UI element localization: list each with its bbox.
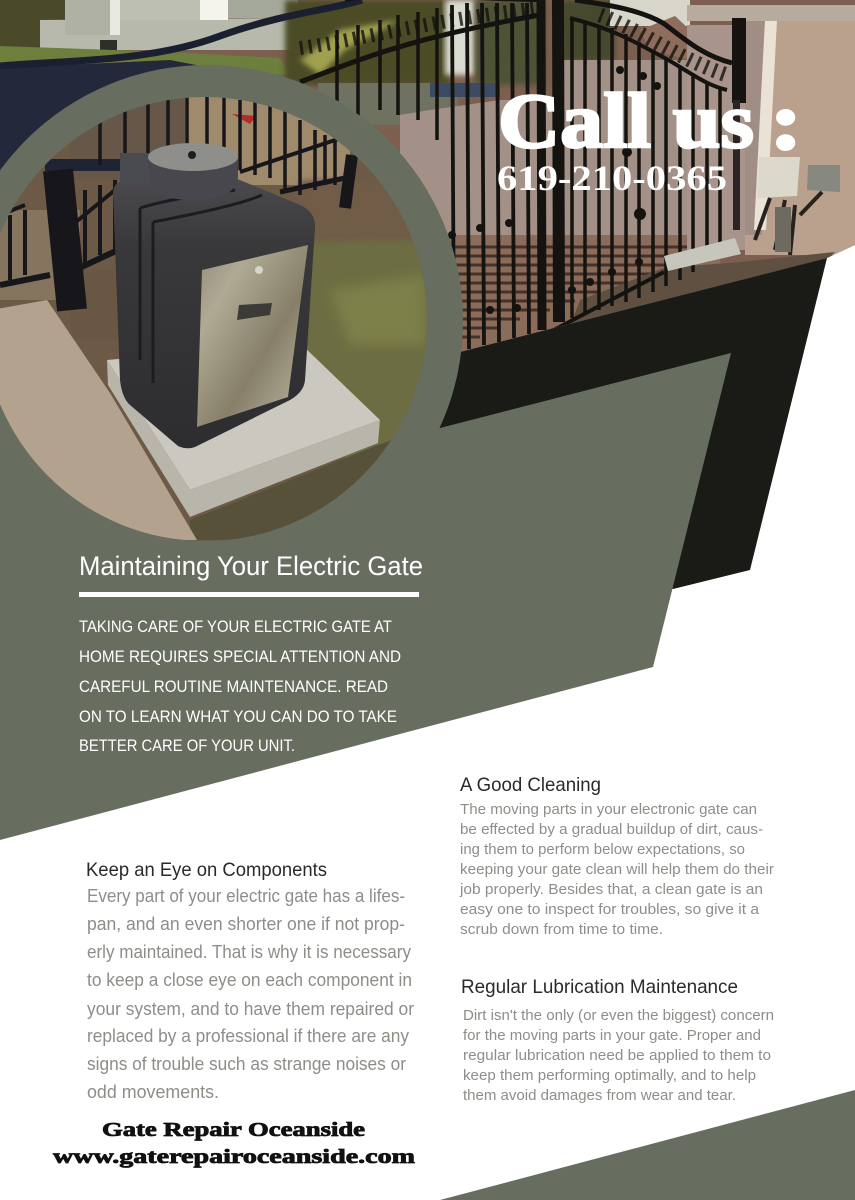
section: keep an eye on components: signs of trouble such as strange noises or (87, 1053, 406, 1074)
black angular shape (430, 258, 827, 589)
section: keep an eye on components: to keep a close eye on each component in (87, 969, 412, 990)
panel title: Maintaining Your Electric Gate (79, 551, 423, 581)
section: keep an eye on components: replaced by a professional if there are any (87, 1025, 410, 1046)
call us heading: : (771, 78, 801, 165)
left gate panel (0, 60, 198, 170)
section: a good cleaning: be effected by a gradual buildup of dirt, caus- (460, 821, 763, 838)
intro text (79, 617, 401, 755)
gate ironwork (0, 0, 732, 353)
concrete base (107, 343, 380, 517)
fence (0, 97, 352, 310)
section: keep an eye on components: odd movements. (87, 1081, 219, 1102)
section: keep an eye on components: erly maintained. That is why it is necessary (87, 941, 412, 962)
palm trees (285, 0, 450, 85)
motor cap (120, 143, 238, 200)
intro text: CAREFUL ROUTINE MAINTENANCE. READ (79, 677, 388, 696)
intro text: ON TO LEARN WHAT YOU CAN DO TO TAKE (79, 707, 397, 726)
section: a good cleaning: A Good Cleaning (460, 774, 601, 796)
bottom right green wedge (440, 1090, 855, 1200)
mulch behind fence (185, 95, 350, 185)
gate opener arm (664, 238, 741, 271)
section: regular lubrication maintenance: for the moving parts in your gate. Proper and (463, 1027, 761, 1044)
section: a good cleaning: scrub down from time to time. (460, 921, 663, 938)
green panel (0, 300, 731, 840)
background house (40, 0, 300, 51)
section: a good cleaning: ing them to perform below expectations, so (460, 841, 745, 858)
call us heading: Call us (498, 77, 754, 164)
concrete path (0, 300, 197, 540)
footer company name: Gate Repair Oceanside (102, 1119, 365, 1141)
footer website: www.gaterepairoceanside.com (53, 1146, 415, 1168)
driveway apron (570, 252, 835, 326)
section: regular lubrication maintenance: Dirt isn't the only (or even the biggest) concern (463, 1007, 774, 1024)
back fence wall (70, 95, 190, 180)
back wall (400, 100, 560, 240)
keyhole (255, 266, 263, 274)
section: keep an eye on components: your system, and to have them repaired or (87, 998, 414, 1019)
steel door panel (197, 245, 308, 427)
driveway floor (440, 235, 720, 360)
section: regular lubrication maintenance: regular lubrication need be applied to them to (463, 1047, 771, 1064)
brand badge (237, 303, 272, 320)
section: keep an eye on components: pan, and an even shorter one if not prop- (87, 913, 405, 934)
section: keep an eye on components: Every part of your electric gate has a lifes- (87, 885, 405, 906)
section: regular lubrication maintenance: Regular Lubrication Maintenance (461, 976, 738, 998)
section: a good cleaning: The moving parts in your electronic gate can (460, 801, 757, 818)
intro text: HOME REQUIRES SPECIAL ATTENTION AND (79, 647, 401, 666)
title rule (79, 592, 419, 597)
background hill (0, 0, 70, 48)
section: regular lubrication maintenance: keep them performing optimally, and to help (463, 1067, 756, 1084)
mulch ground (298, 178, 342, 185)
intro text: TAKING CARE OF YOUR ELECTRIC GATE AT (79, 617, 392, 636)
circular photo: gate operator box (0, 90, 440, 550)
section: a good cleaning: easy one to inspect for troubles, so give it a (460, 901, 760, 918)
control boxes (755, 157, 840, 255)
section: a good cleaning: job properly. Besides that, a clean gate is an (459, 881, 763, 898)
gate rosettes (448, 66, 661, 314)
operator box (113, 143, 315, 448)
section: a good cleaning: keeping your gate clean will help them do their (460, 861, 774, 878)
green ring around photo (0, 65, 463, 577)
section: a good cleaning (459, 774, 774, 938)
intro text: BETTER CARE OF YOUR UNIT. (79, 736, 295, 755)
chain link fence (318, 83, 458, 125)
photo: iron gate and driveway (0, 0, 855, 352)
section: keep an eye on components (86, 859, 414, 1102)
phone number: 619-210-0365 (497, 158, 727, 198)
section: regular lubrication maintenance (461, 976, 774, 1104)
grass (307, 240, 427, 458)
hedge (0, 46, 290, 75)
section: keep an eye on components: Keep an Eye on Components (86, 859, 327, 881)
pillar: stucco wall (687, 5, 855, 255)
section: regular lubrication maintenance: them avoid damages from wear and tear. (463, 1087, 736, 1104)
